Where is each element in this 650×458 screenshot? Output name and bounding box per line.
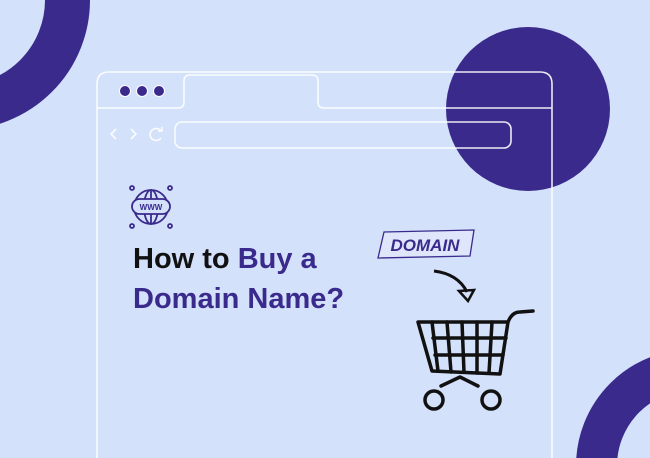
- title: [133, 243, 344, 315]
- icon: www globe: WWW: [140, 203, 163, 212]
- window dots: [120, 86, 164, 96]
- decorative ring top-left: [0, 0, 68, 108]
- browser window frame: [97, 72, 552, 458]
- decorative big circle: [446, 27, 610, 191]
- arrow: [434, 271, 474, 301]
- domain stamp: [378, 230, 474, 258]
- decorative ring bottom-right: [596, 370, 650, 458]
- icon: shopping cart: [418, 311, 533, 409]
- domain stamp: DOMAIN: [391, 236, 460, 255]
- title: How to Buy a: [133, 243, 318, 275]
- title: Domain Name?: [133, 283, 344, 315]
- icon: www globe: [130, 186, 172, 228]
